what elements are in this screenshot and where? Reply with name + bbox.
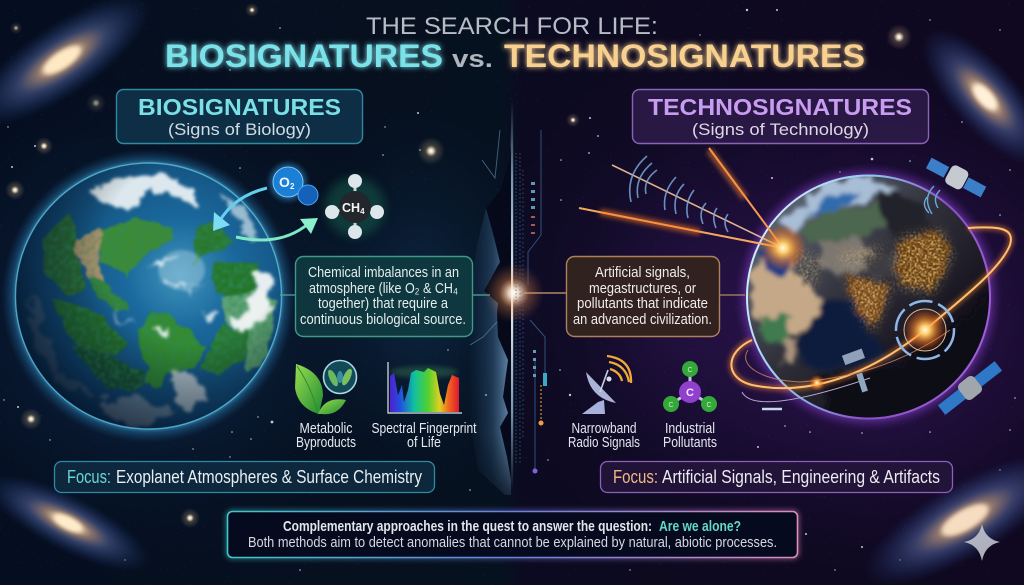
icon: industrial pollutant molecule: C [668, 402, 674, 409]
title: THE SEARCH FOR LIFE: [366, 13, 658, 40]
focus bar: technosignatures: Artificial Signals, Engineering & Artifacts [662, 467, 940, 487]
bottom conclusion panel: Complementary approaches in the quest to answer the question: [283, 518, 652, 535]
radio waves [630, 156, 728, 232]
land: forest diagonal [52, 298, 128, 355]
clouds: tropics [148, 255, 178, 265]
icon: O2 molecule: O [279, 174, 290, 190]
orbit ring with energy burst [731, 227, 1011, 409]
terrain: mediterranean [762, 250, 792, 277]
clouds: east [218, 192, 262, 242]
labels: biosignature icons: Byproducts [296, 435, 356, 451]
callout: technosignature description [566, 256, 745, 336]
icon: CH4 molecule: CH [342, 201, 360, 215]
title [165, 13, 865, 74]
land: northeast forest [193, 223, 233, 265]
focus bar: biosignatures [54, 462, 434, 492]
title: vs. [452, 46, 493, 73]
satellite: top right [924, 153, 989, 214]
terrain: southern night [818, 293, 992, 423]
arrow: earth to CH4 [236, 218, 318, 240]
focus bar: technosignatures [600, 462, 952, 492]
icon: industrial pollutant molecule: C [687, 367, 693, 374]
title: TECHNOSIGNATURES [504, 38, 865, 74]
city lights [847, 275, 892, 332]
arrow: O2 to earth [213, 188, 267, 231]
terrain: polar haze [782, 177, 898, 233]
labels: biosignature icons: Metabolic [300, 421, 352, 437]
icon: industrial pollutant molecule: C [706, 402, 712, 409]
callout: technosignature description: pollutants that indicate [577, 295, 708, 312]
terrain: africa green [760, 317, 790, 347]
bottom conclusion panel: Both methods aim to detect anomalies that cannot be explained by natural, abiotic processes. [248, 534, 777, 551]
land: western desert [73, 230, 105, 287]
satellite: bottom right [935, 358, 1005, 418]
focus bar: biosignatures: Focus: [67, 467, 111, 487]
bottom conclusion panel: Are we alone? [659, 518, 741, 535]
focus bar: biosignatures: Exoplanet Atmospheres & Surface Chemistry [116, 467, 422, 487]
icon: industrial pollutant molecule: C [686, 387, 694, 399]
center divider: crack and circuit traces [468, 100, 566, 495]
terrain: dark highland [875, 190, 938, 243]
heading panel: technosignatures [632, 90, 928, 144]
callout: biosignature description: Chemical imbalances in an [308, 264, 459, 281]
icon: CH4 molecule [325, 174, 385, 239]
land: northwest mottled [43, 212, 85, 295]
callout: biosignature description: atmosphere (like O₂ & CH₄ [309, 280, 458, 297]
icon: O2 molecule: 2 [290, 182, 295, 191]
callout: biosignature description: continuous biological source. [300, 311, 466, 328]
terrain: east asia [895, 233, 948, 290]
earth: technosignatures planet [734, 163, 1002, 431]
land: east forest [213, 260, 259, 298]
land: central america [88, 278, 130, 312]
callout: biosignature description [280, 256, 490, 336]
focus bar: technosignatures: Focus: [613, 467, 658, 487]
icon: radio dish [582, 356, 631, 414]
terrain: green grey steppe [795, 203, 895, 243]
galaxy: bottom left [0, 456, 163, 585]
galaxy: bottom right [846, 430, 1024, 585]
terrain: blue sea north [805, 190, 862, 217]
icon: metabolic byproducts leaf [295, 360, 356, 414]
labels: technosignature icons: Radio Signals [568, 435, 640, 451]
heading panel: technosignatures: TECHNOSIGNATURES [648, 94, 912, 120]
land: south america [137, 312, 205, 388]
callout: technosignature description: Artificial signals, [595, 264, 690, 281]
earth: biosignatures planet [2, 149, 296, 443]
labels: biosignature icons [296, 421, 476, 451]
heading panel: technosignatures: (Signs of Technology) [692, 120, 869, 139]
labels: technosignature icons [568, 421, 717, 451]
land: southeast forest [202, 322, 248, 375]
chart: spectral fingerprint [388, 362, 462, 413]
galaxy: top left [0, 0, 169, 149]
satellite: small orbiting units [842, 349, 868, 392]
land: south west dark [68, 342, 145, 388]
labels: biosignature icons: Spectral Fingerprint [372, 421, 476, 437]
clouds: north [92, 175, 198, 208]
labels: technosignature icons: Narrowband [572, 421, 636, 437]
signal beams [579, 148, 807, 272]
icon: industrial pollutant molecule [663, 361, 717, 412]
land: north america [100, 218, 175, 275]
callout: biosignature description: together) that require a [318, 295, 449, 312]
heading panel: biosignatures: (Signs of Biology) [168, 120, 311, 139]
clouds: south [172, 368, 208, 412]
terrain: indian ocean [798, 300, 895, 370]
terrain: grey central [818, 237, 882, 277]
icon: O2 molecule [269, 163, 318, 205]
terrain: india [845, 277, 892, 330]
title: BIOSIGNATURES [165, 38, 443, 74]
labels: technosignature icons: Industrial [665, 421, 715, 437]
labels: technosignature icons: Pollutants [663, 435, 717, 451]
icon: sparkle watermark [964, 524, 1000, 561]
labels: biosignature icons: of Life [407, 435, 441, 451]
terrain: arabia and africa tan [748, 257, 822, 340]
land: far east light green [222, 288, 277, 372]
heading panel: biosignatures: BIOSIGNATURES [138, 94, 341, 120]
callout: technosignature description: an advanced civilization. [573, 311, 712, 328]
callout: technosignature description: megastructures, or [589, 280, 696, 297]
galaxy: top right [901, 9, 1024, 185]
heading panel: biosignatures [116, 90, 362, 144]
bottom conclusion panel [228, 512, 798, 558]
icon: CH4 molecule: 4 [360, 207, 365, 216]
